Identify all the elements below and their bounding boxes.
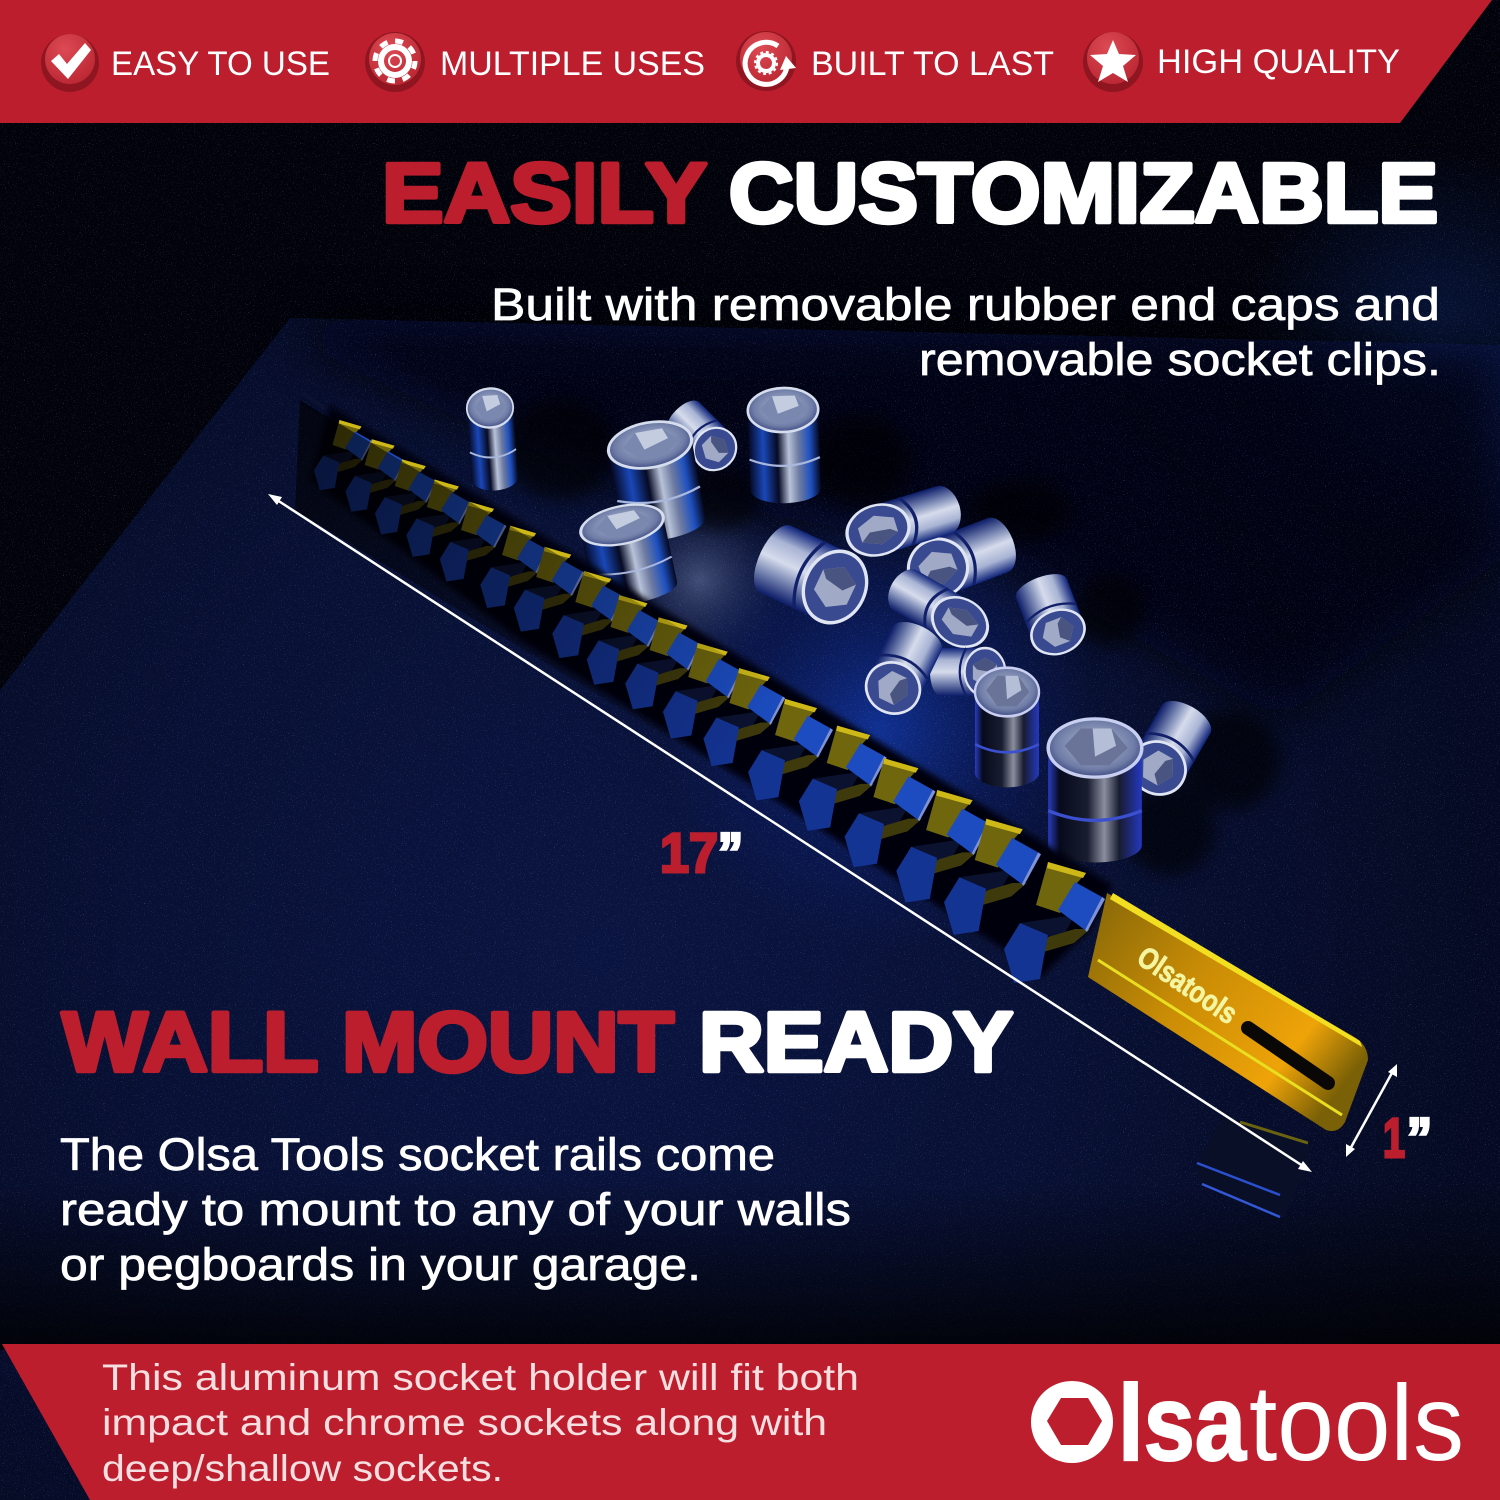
text: wall mount description	[60, 1129, 851, 1290]
benefit: high quality: HIGH QUALITY	[1157, 43, 1400, 81]
heading: wall mount ready	[62, 995, 1013, 1089]
heading: wall mount ready: READY	[699, 995, 1013, 1089]
logo: Olsatools	[1030, 1362, 1464, 1485]
heading: easily customizable: CUSTOMIZABLE	[729, 146, 1438, 240]
benefit: multiple uses	[365, 32, 705, 92]
heading: wall mount ready: WALL MOUNT	[62, 995, 674, 1089]
socket rail with clips	[295, 393, 1112, 983]
text: removable caps and clips	[491, 279, 1441, 385]
label: 17 inches: 17	[660, 821, 718, 884]
top red banner	[0, 0, 1492, 123]
text: wall mount description: ready to mount to any of your walls	[60, 1184, 851, 1235]
benefit: high quality	[1083, 32, 1400, 92]
benefit: easy to use	[41, 34, 330, 92]
label: 1 inch: 1	[1383, 1106, 1405, 1169]
sockets group	[465, 387, 1217, 862]
text: removable caps and clips: removable socket clips.	[919, 334, 1441, 385]
text: socket compatibility: This aluminum socket holder will fit both	[102, 1357, 859, 1398]
benefit: multiple uses: MULTIPLE USES	[440, 45, 705, 83]
removable end cap	[1197, 1117, 1310, 1218]
benefit: built to last	[736, 31, 1054, 91]
text: removable caps and clips: Built with removable rubber end caps and	[491, 279, 1440, 330]
logo: Olsatools: tools	[1249, 1362, 1464, 1483]
heading: easily customizable	[382, 146, 1438, 240]
text: wall mount description: The Olsa Tools socket rails come	[60, 1129, 775, 1180]
text: socket compatibility: deep/shallow sockets.	[102, 1448, 503, 1489]
heading: easily customizable: EASILY	[382, 146, 707, 240]
socket shadows	[505, 400, 1280, 875]
label: 1 inch	[1383, 1106, 1432, 1169]
benefit: built to last: BUILT TO LAST	[811, 45, 1054, 83]
logo: Olsatools: lsa	[1118, 1362, 1247, 1483]
arrow: 1 inch width	[1346, 1064, 1397, 1157]
text: socket compatibility: impact and chrome sockets along with	[102, 1402, 827, 1443]
bottom red banner	[2, 1344, 1500, 1500]
label: 17 inches: ”	[718, 821, 743, 884]
rail end plate with logo and slot	[1088, 893, 1368, 1131]
logo: Olsatools: O	[1030, 1362, 1114, 1485]
text: socket compatibility	[102, 1357, 859, 1489]
arrow: 17 inch length	[268, 494, 1312, 1172]
rail end plate with logo and slot: Olsatools	[1131, 940, 1243, 1031]
label: 1 inch: ”	[1407, 1106, 1432, 1169]
benefit: easy to use: EASY TO USE	[111, 45, 330, 83]
text: wall mount description: or pegboards in your garage.	[60, 1239, 701, 1290]
